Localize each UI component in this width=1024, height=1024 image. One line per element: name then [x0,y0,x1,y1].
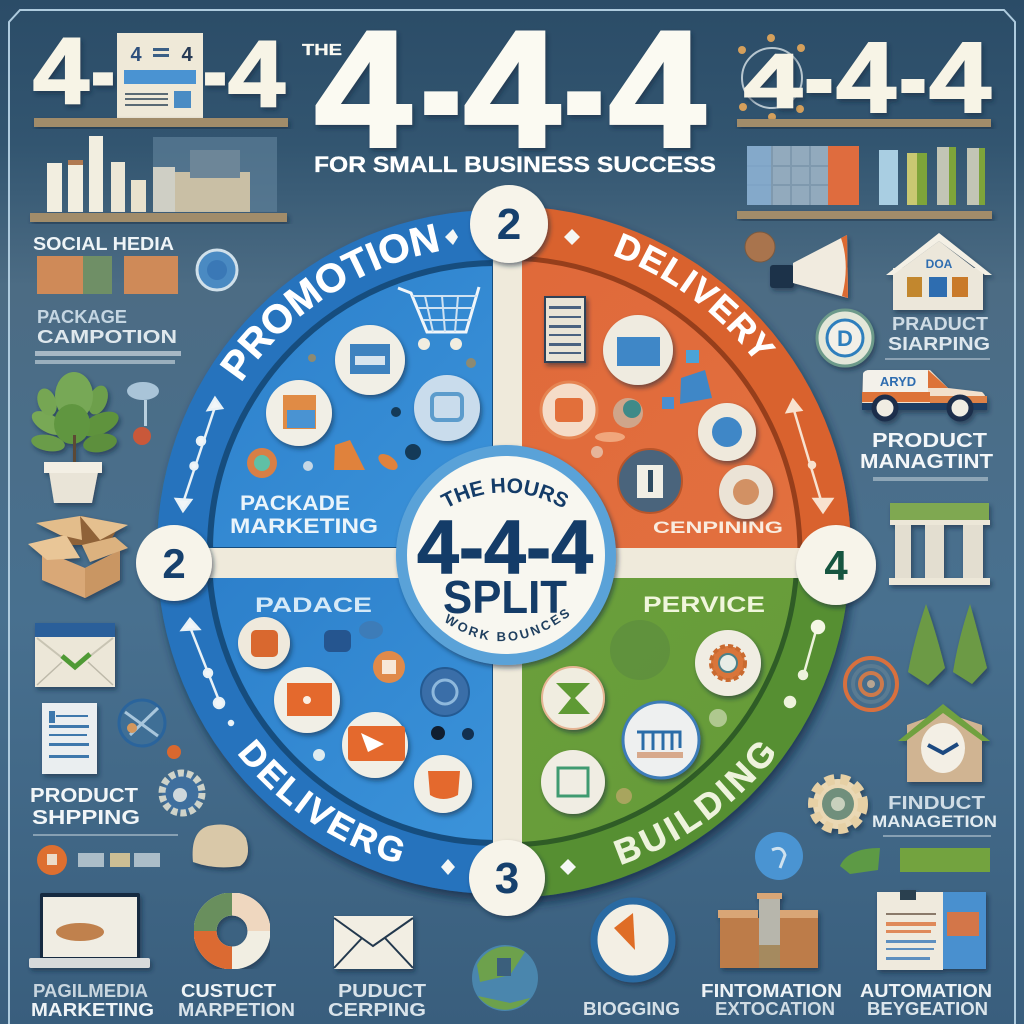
ring star ornaments [441,229,580,875]
bottom labels left: CUSTUCT [181,981,276,1001]
small coloured label row [37,845,160,875]
title: 4 [609,0,705,181]
badge: top 2: 2 [497,200,521,249]
top-left 4-4 shelf with document [33,18,288,127]
icon: open cardboard box [28,516,128,598]
icon: columns [889,503,990,585]
label: product sharping [885,314,990,360]
label: product management: PRODUCT [872,430,987,452]
icons: building quadrant [541,620,761,814]
badge: left 2 [136,525,212,601]
main circle diagram [136,185,880,921]
icon: green trees [908,604,987,685]
top-right books shelf [737,146,992,219]
left label: package campaign: PACKAGE [37,307,127,327]
bottom labels right [701,981,992,1019]
top-left 4-4 shelf with document: 4 [181,44,193,66]
left label: product shipping: PRODUCT [30,785,138,807]
icon: shopping cart [398,287,479,350]
icon: green roof house [898,704,990,782]
icon: D badge [817,310,873,366]
left label: product shipping: SHPPING [32,807,140,829]
bottom labels left: CERPING [328,1000,426,1020]
badge: right 4: 4 [824,542,848,589]
icons: delivery quadrant [541,297,773,519]
bottom labels left: PAGILMEDIA [33,981,148,1001]
center badge: the hours 4-4-4 split: THE HOURS [440,478,568,507]
label: pervice: PERVICE [643,592,765,617]
badge: bottom 3 [469,840,545,916]
top-left 4-4 shelf with document: 4 [33,18,89,123]
icon: envelope [35,623,115,687]
icon: report sheets [877,890,986,970]
badge: right 4 [796,525,876,605]
icon: house: DOA [926,257,953,271]
icon: document and globe [42,700,181,774]
inner panel: building [505,553,797,845]
label: padace: PADACE [255,594,372,617]
icon: laptop [29,893,150,968]
left label: package campaign [35,307,181,364]
center badge: the hours 4-4-4 split [394,444,622,672]
title: 4 [315,0,411,181]
top-right 4-4-4 shelf [737,22,991,134]
left label: social media: SOCIAL HEDIA [33,234,174,254]
badge: left 2: 2 [162,540,186,587]
label: package marketing: MARKETING [230,515,378,538]
icons: blue dot and green tag [755,832,990,880]
label: blogging: BIOGGING [583,999,680,1019]
title [302,0,716,181]
icons: promotion quadrant [247,287,480,478]
left label: product shipping [30,785,178,836]
icon: envelope white [334,916,413,969]
badge: bottom 3: 3 [495,854,519,903]
label: product management 2: MANAGETION [872,812,997,831]
bottom labels right: BEYGEATION [867,999,988,1019]
top-right 4-4-4 shelf: - [899,22,927,134]
icon: megaphone [770,235,848,298]
bottom labels left: PUDUCT [338,981,426,1001]
icon: house [886,233,992,310]
inner panel: delivery [505,258,800,553]
icon: beige stone [193,824,248,867]
bottom labels left: MARKETING [31,1000,154,1020]
icon: potted plant [28,372,122,503]
icon: target spiral [845,658,897,710]
cross dividers [207,258,803,848]
label: centering: CENPINING [653,518,783,537]
icon: donut chart [205,904,259,958]
top-left 4-4 shelf with document: - [203,18,227,123]
heading: promotion: PROMOTION [220,224,439,382]
icon: small globe [472,945,538,1011]
bottom labels right: AUTOMATION [860,981,992,1001]
icon: delivery van: ARYD [880,374,916,389]
icon: delivery van [862,370,987,419]
icon: decorative lamp [127,382,159,445]
label: product management 2: FINDUCT [888,793,985,813]
icon: medal [745,232,775,262]
center badge: the hours 4-4-4 split: SPLIT [443,571,567,623]
inner panel: delivering [209,555,495,843]
icon: gear [813,779,863,829]
label: product sharping: SIARPING [888,334,990,354]
icons: delivering quadrant [238,617,474,813]
title: THE [302,42,342,59]
bottom labels right: EXTOCATION [715,999,835,1019]
bottom labels left: MARPETION [178,1000,295,1020]
top-left 4-4 shelf with document: 4 [228,21,285,126]
center badge: the hours 4-4-4 split: 4-4-4 [417,505,593,590]
icon: gear [162,773,202,813]
left label: social media [33,234,237,294]
top-left bar shelf [30,136,287,222]
inner panel: promotion [210,263,495,550]
title: FOR SMALL BUSINESS SUCCESS [314,152,716,177]
heading: delivering: DELIVERG [238,738,404,862]
badge: top 2 [470,185,548,263]
left label: package campaign: CAMPOTION [37,327,177,347]
top-right 4-4-4 shelf: 4 [744,39,802,124]
icon: clock [594,901,672,979]
bottom labels left [31,981,426,1020]
label: package marketing [230,492,378,538]
title: - [421,0,461,181]
bottom labels right: FINTOMATION [701,981,842,1001]
title: - [564,0,604,181]
label: product management: MANAGTINT [860,451,993,473]
center badge: the hours 4-4-4 split: WORK BOUNCES [446,609,570,642]
label: product sharping: PRADUCT [892,314,988,334]
label: product management [860,430,993,481]
label: product management 2 [872,793,997,837]
heading: building: BUILDING [613,742,774,865]
icon: D badge: D [837,326,853,351]
top-right 4-4-4 shelf: - [804,22,834,134]
ring arrows [176,398,832,725]
top-left 4-4 shelf with document: 4 [130,44,142,66]
top-left 4-4 shelf with document: - [91,18,115,123]
heading: delivery: DELIVERY [614,233,776,357]
icon: brown cabinet building [718,893,818,968]
top-right 4-4-4 shelf: 4 [929,22,991,134]
top-right 4-4-4 shelf: 4 [836,22,896,134]
title: 4 [464,0,560,181]
label: package marketing: PACKADE [240,492,350,515]
outer ring quadrants [157,206,851,898]
